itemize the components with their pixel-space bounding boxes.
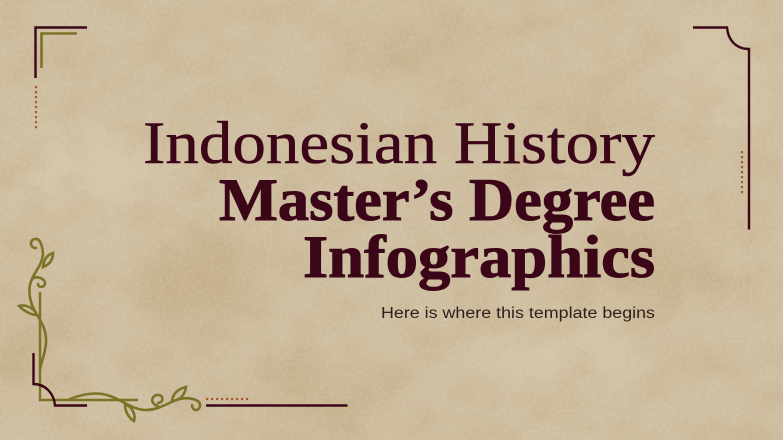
top-left corner frame [36, 28, 87, 131]
top-right corner frame [693, 28, 749, 230]
bottom rule with dots [206, 399, 348, 406]
icon: vertical vine [19, 239, 53, 370]
title line 3: Infographics [303, 224, 655, 290]
title line 1: Indonesian History [143, 110, 655, 176]
title [143, 110, 655, 290]
icon: horizontal vine [70, 387, 200, 421]
olive corner bracket [40, 292, 138, 400]
bottom-left floral corner frame [19, 239, 200, 421]
maroon corner bracket [34, 353, 87, 406]
title line 2: Master’s Degree [219, 167, 655, 233]
subtitle: Here is where this template begins [381, 305, 655, 322]
